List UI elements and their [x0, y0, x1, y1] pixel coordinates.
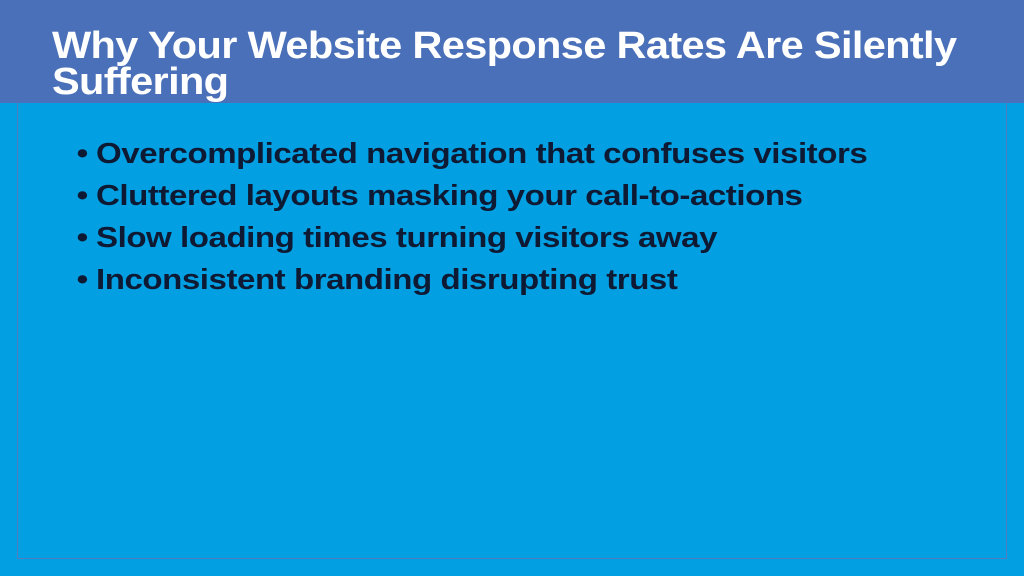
bullet list: Inconsistent branding disrupting trust: [96, 264, 677, 296]
content frame: [17, 103, 1007, 559]
bullet list: Cluttered layouts masking your call-to-actions: [96, 180, 802, 212]
bullet list: Overcomplicated navigation that confuses visitors: [96, 138, 867, 170]
title: Why Your Website Response Rates Are Silently: [52, 25, 956, 67]
header band: [0, 0, 1024, 103]
title: [52, 25, 957, 103]
bullet list: Slow loading times turning visitors away: [96, 222, 717, 254]
title: Suffering: [52, 61, 228, 103]
bullet list: [78, 138, 867, 296]
